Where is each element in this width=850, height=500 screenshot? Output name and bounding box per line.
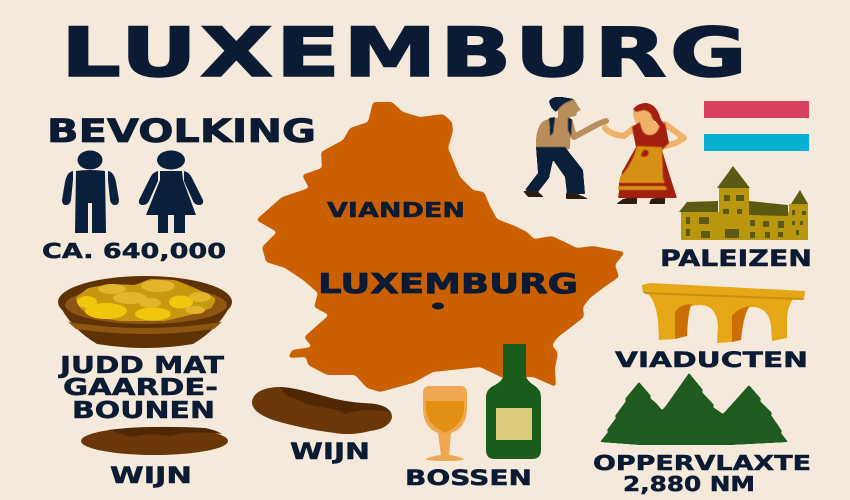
label: Bossen: BOSSEN bbox=[405, 466, 532, 490]
capital dot bbox=[432, 302, 444, 310]
label: area: OPPERVLAXTE bbox=[593, 451, 811, 475]
map label: Luxemburg: LUXEMBURG bbox=[318, 267, 578, 300]
label: dish name: JUDD MAT bbox=[57, 353, 224, 379]
icon: viaduct bbox=[642, 283, 805, 343]
label: dish name bbox=[57, 353, 224, 424]
icon: palace bbox=[679, 166, 808, 240]
label: Paleizen: PALEIZEN bbox=[660, 247, 812, 272]
man bbox=[523, 97, 606, 199]
label: dish name: BOUNEN bbox=[72, 398, 215, 424]
heading: Bevolking: BEVOLKING bbox=[47, 112, 316, 150]
label: dish name: GAARDE- bbox=[63, 375, 218, 401]
icon: man and woman bbox=[62, 150, 203, 233]
label: Wijn left: WIJN bbox=[110, 464, 192, 489]
title: LUXEMBURG bbox=[61, 14, 747, 93]
icon: forest bbox=[600, 373, 788, 445]
icon: wine glass bbox=[423, 386, 467, 461]
woman bbox=[605, 103, 684, 204]
icon: flag bbox=[704, 101, 809, 151]
label: Wijn centre: WIJN bbox=[290, 440, 370, 465]
map label: Vianden: VIANDEN bbox=[327, 198, 465, 222]
icon: sausage left bbox=[81, 427, 228, 455]
label: area bbox=[593, 451, 811, 496]
map of Luxembourg bbox=[256, 102, 625, 392]
label: population: CA. 640,000 bbox=[42, 239, 226, 263]
icon: sausage centre bbox=[252, 387, 392, 434]
icon: dancing couple bbox=[523, 97, 684, 204]
label: Viaducten: VIADUCTEN bbox=[615, 348, 808, 372]
icon: wine bottle bbox=[486, 344, 541, 459]
icon: bowl of Judd mat Gaardebounen bbox=[58, 276, 232, 348]
label: area: 2,880 NM bbox=[623, 472, 755, 496]
